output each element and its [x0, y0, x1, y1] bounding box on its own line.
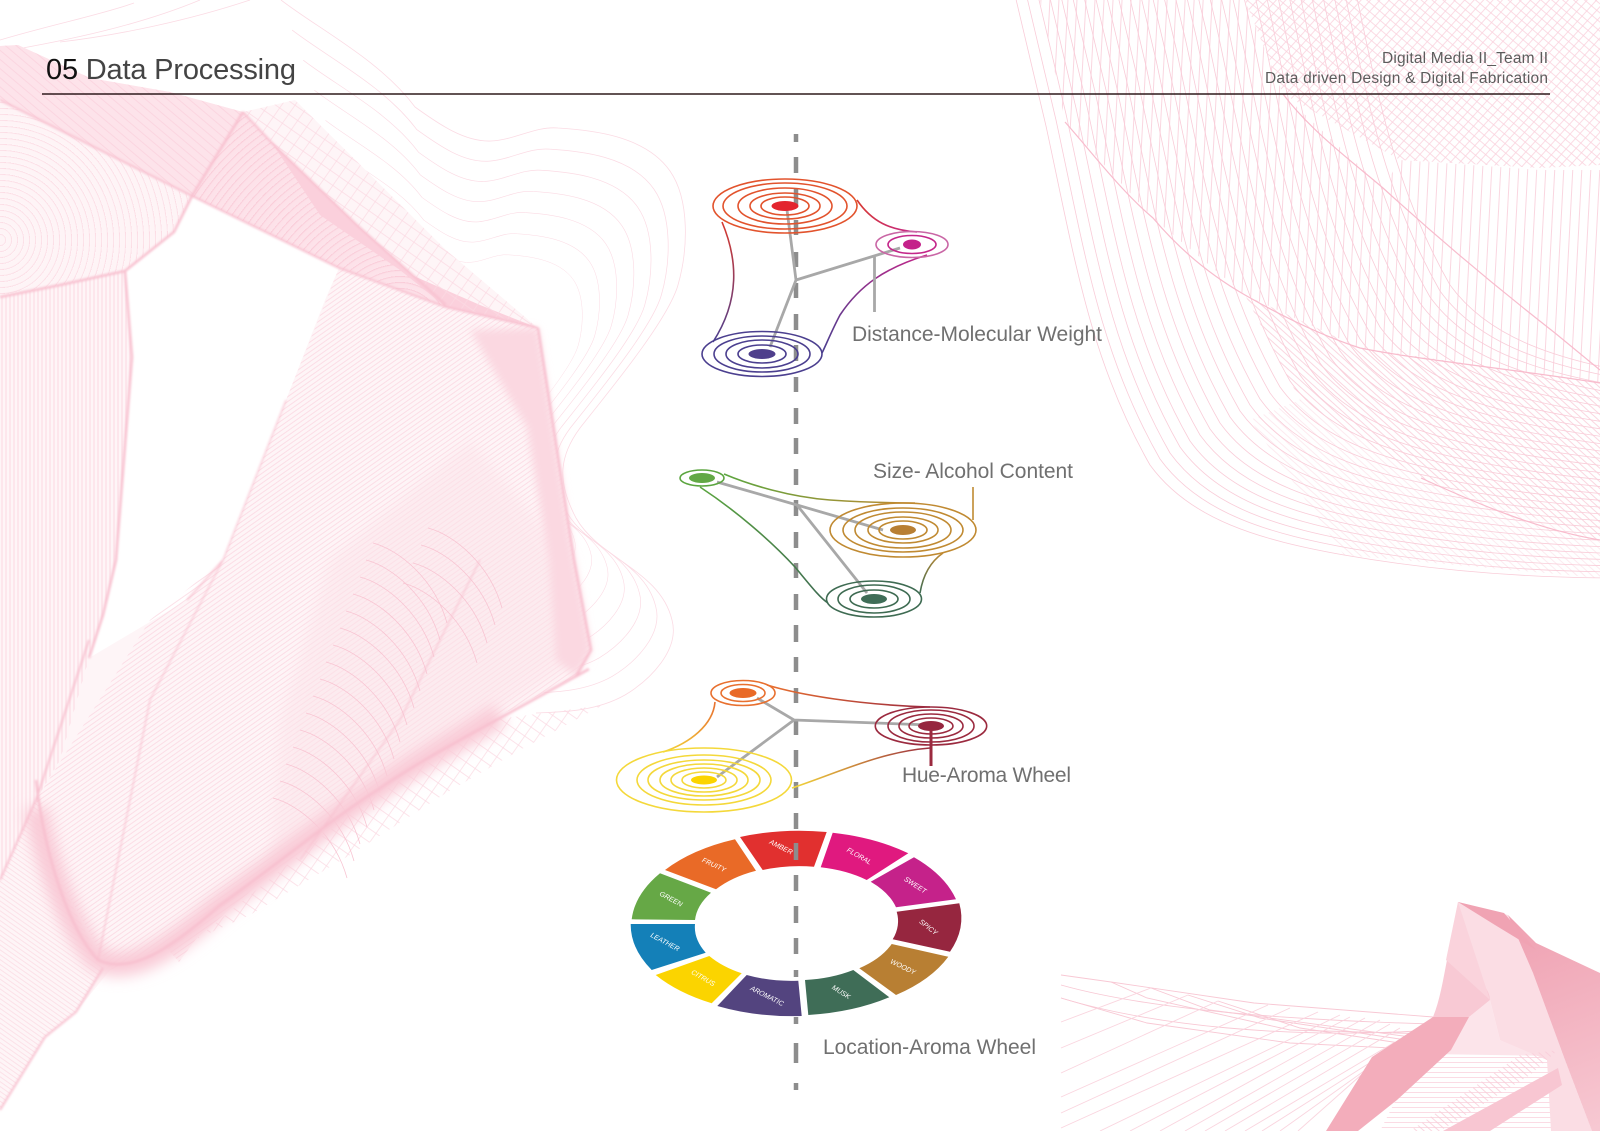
segment: CITRUS	[656, 956, 742, 1003]
upper-left fan	[0, 100, 192, 297]
central dashed axis	[794, 134, 798, 1090]
curl shoulder	[1433, 960, 1490, 1017]
denser mesh tone in the middle of the body	[270, 440, 585, 870]
segment: AROMATIC: AROMATIC	[748, 985, 785, 1008]
node: amber	[830, 503, 976, 557]
pale rising line fan	[1061, 988, 1400, 1131]
segment: SPICY: SPICY	[917, 919, 939, 938]
header right text: Data driven Design & Digital Fabrication	[1265, 70, 1548, 87]
label: location: Location-Aroma Wheel	[823, 1036, 1036, 1059]
denser valley of the ribbon	[36, 715, 500, 964]
arched ribbon band	[1326, 1017, 1469, 1131]
outer parallel line family	[1015, 0, 1600, 578]
segment: FLORAL	[821, 833, 908, 880]
dense lower band	[1245, 295, 1600, 540]
left vertical strand	[0, 271, 132, 880]
segment: AMBER	[740, 831, 827, 870]
label: distance: Distance-Molecular Weight	[852, 323, 1102, 346]
spokes	[770, 210, 900, 347]
bottom tail	[0, 800, 103, 1110]
segment: CITRUS: CITRUS	[690, 969, 716, 988]
node: magenta	[876, 232, 948, 258]
centre fold fan	[192, 112, 538, 328]
header rule	[42, 93, 1550, 95]
aroma wheel	[631, 831, 961, 1016]
segment: LEATHER	[631, 924, 706, 970]
node: red	[713, 179, 857, 233]
dark right band	[1508, 915, 1600, 1131]
segment: FRUITY	[665, 839, 756, 889]
hull curves	[663, 685, 930, 788]
segment: WOODY	[859, 944, 948, 995]
lower mesh lines	[1380, 1052, 1600, 1131]
spokes	[717, 482, 883, 593]
dark top fold	[1458, 902, 1536, 950]
pale mesh behind the curl	[1425, 1000, 1560, 1056]
header right text: Digital Media II_Team II	[1382, 50, 1548, 67]
ribbon body tone	[0, 45, 591, 1110]
segment: FLORAL: FLORAL	[845, 847, 872, 867]
segment: GREEN	[632, 873, 711, 920]
segment: SWEET: SWEET	[902, 876, 928, 896]
node: green	[680, 470, 724, 486]
hull curves	[700, 474, 973, 603]
lace fringe under the ribbon	[196, 705, 603, 939]
network: size - alcohol content	[680, 470, 976, 617]
node: yellow	[616, 748, 792, 812]
vertical lines	[1040, 0, 1600, 383]
segment: LEATHER: LEATHER	[649, 932, 680, 953]
background: bottom-right pink ribbon	[1061, 902, 1600, 1131]
segment: SWEET	[871, 857, 956, 907]
title: 05 Data Processing	[46, 54, 296, 86]
node: purple	[702, 332, 822, 376]
segment: GREEN: GREEN	[658, 891, 684, 909]
dense crease wedges	[272, 143, 446, 305]
segment: MUSK: MUSK	[830, 984, 852, 1001]
pale contour lines around the ribbon	[0, 0, 685, 713]
spokes	[717, 698, 930, 777]
node: crimson	[875, 707, 987, 766]
ribbon crease strokes	[0, 100, 591, 1110]
segment: AROMATIC	[717, 975, 802, 1016]
rising strand	[1443, 1068, 1562, 1131]
background: top-right pink line-mesh ribbon	[1015, 0, 1600, 578]
right vertical band	[470, 328, 591, 676]
sparse fan above fold	[243, 100, 538, 328]
crease lines	[1065, 94, 1600, 540]
pale descending line fan	[1061, 975, 1560, 1052]
label: hue: Hue-Aroma Wheel	[902, 764, 1071, 787]
label: size: Size- Alcohol Content	[873, 460, 1073, 483]
network: hue - aroma wheel	[616, 680, 987, 812]
header right text	[1265, 50, 1548, 87]
pale fold	[1447, 902, 1592, 1131]
node: orange	[711, 680, 775, 706]
segment: FRUITY: FRUITY	[701, 857, 728, 875]
ribbon body fine hatching	[36, 268, 591, 970]
inner arcs	[273, 528, 502, 878]
segment: MUSK	[805, 970, 889, 1015]
segment: SPICY	[893, 903, 961, 952]
top-right crossed mesh	[1245, 0, 1600, 168]
node: dark green	[826, 581, 922, 617]
hull curves	[713, 200, 927, 353]
network: distance - molecular weight	[702, 179, 948, 376]
segment: AMBER: AMBER	[767, 838, 793, 856]
segment: WOODY: WOODY	[889, 959, 918, 977]
background: left pink line-mesh ribbon	[0, 0, 685, 1110]
